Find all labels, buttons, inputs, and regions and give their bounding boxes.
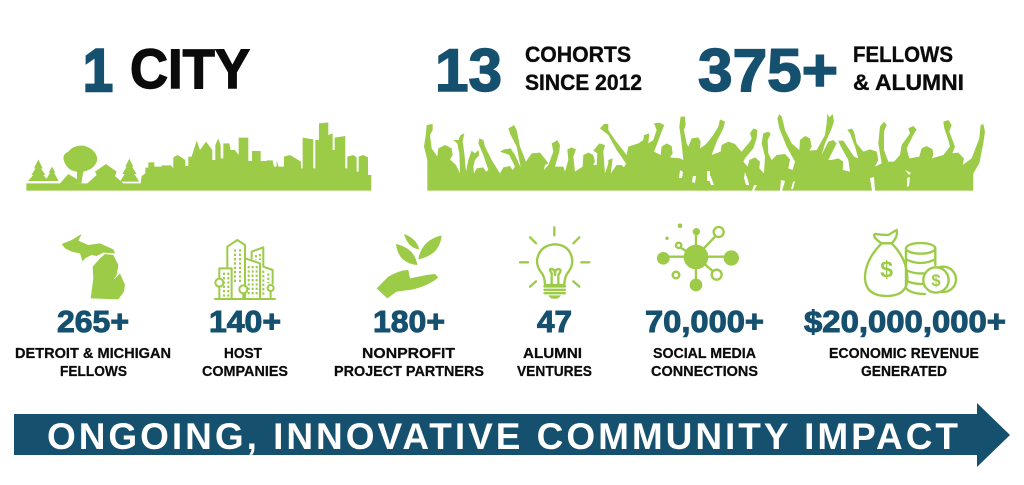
stat: 140+ host companies	[202, 304, 288, 380]
city skyline silhouette	[26, 122, 371, 191]
stat: 47 alumni ventures: VENTURES	[517, 364, 592, 380]
icon: money bag and coins: $	[931, 271, 941, 290]
stat: $20,000,000+ economic revenue generated	[804, 304, 1006, 380]
heading: 375+ fellows and alumni	[698, 37, 964, 104]
arrow banner: ongoing, innovative community impact	[14, 403, 1010, 467]
heading: 375+ fellows and alumni: & ALUMNI	[853, 70, 964, 95]
stat: 265+ Detroit and Michigan fellows: FELLOWS	[60, 364, 127, 380]
heading: 13 cohorts since 2012	[435, 37, 642, 104]
icon: money bag and coins: $	[880, 256, 893, 282]
stat: 140+ host companies: HOST	[224, 346, 262, 362]
stat: 47 alumni ventures	[517, 304, 592, 380]
stat: 265+ Detroit and Michigan fellows: DETROIT & MICHIGAN	[15, 346, 171, 362]
heading: 375+ fellows and alumni: FELLOWS	[853, 42, 953, 67]
stat: 265+ Detroit and Michigan fellows: 265+	[57, 304, 129, 339]
stat: 70,000+ social media connections: SOCIAL MEDIA	[653, 346, 757, 362]
stat: 47 alumni ventures: 47	[537, 304, 572, 339]
heading: 1 city: CITY	[130, 37, 250, 100]
stat: 180+ nonprofit project partners: NONPROFIT	[362, 346, 455, 362]
crowd silhouette	[424, 113, 985, 191]
stat: 140+ host companies: 140+	[209, 304, 281, 339]
arrow banner: ongoing, innovative community impact: ONGOING, INNOVATIVE COMMUNITY IMPACT	[47, 416, 958, 457]
stat: 70,000+ social media connections: 70,000+	[645, 304, 764, 339]
stat: 265+ Detroit and Michigan fellows	[15, 304, 171, 380]
heading: 13 cohorts since 2012: SINCE 2012	[525, 70, 642, 95]
heading: 1 city: 1	[83, 37, 113, 104]
heading: 13 cohorts since 2012: COHORTS	[525, 42, 631, 67]
icon: hand holding leaves	[377, 234, 442, 298]
stat: 47 alumni ventures: ALUMNI	[523, 346, 582, 362]
heading: 1 city	[83, 37, 250, 104]
stat: $20,000,000+ economic revenue generated: ECONOMIC REVENUE	[829, 346, 979, 362]
heading: 13 cohorts since 2012: 13	[435, 37, 502, 104]
icon: light bulb	[520, 227, 589, 299]
icon: Michigan map	[62, 234, 125, 299]
stat: 140+ host companies: COMPANIES	[202, 364, 288, 380]
stat: 70,000+ social media connections	[645, 304, 764, 380]
heading: 375+ fellows and alumni: 375+	[698, 37, 838, 104]
stat: 180+ nonprofit project partners: 180+	[373, 304, 445, 339]
icon: network nodes	[657, 223, 739, 291]
stat: $20,000,000+ economic revenue generated: $20,000,000+	[804, 304, 1006, 339]
icon: city buildings	[215, 240, 275, 299]
stat: $20,000,000+ economic revenue generated: GENERATED	[861, 364, 947, 380]
stat: 180+ nonprofit project partners	[334, 304, 484, 380]
icon: money bag and coins	[865, 230, 956, 296]
stat: 70,000+ social media connections: CONNECTIONS	[651, 364, 758, 380]
stat: 180+ nonprofit project partners: PROJECT PARTNERS	[334, 364, 484, 380]
